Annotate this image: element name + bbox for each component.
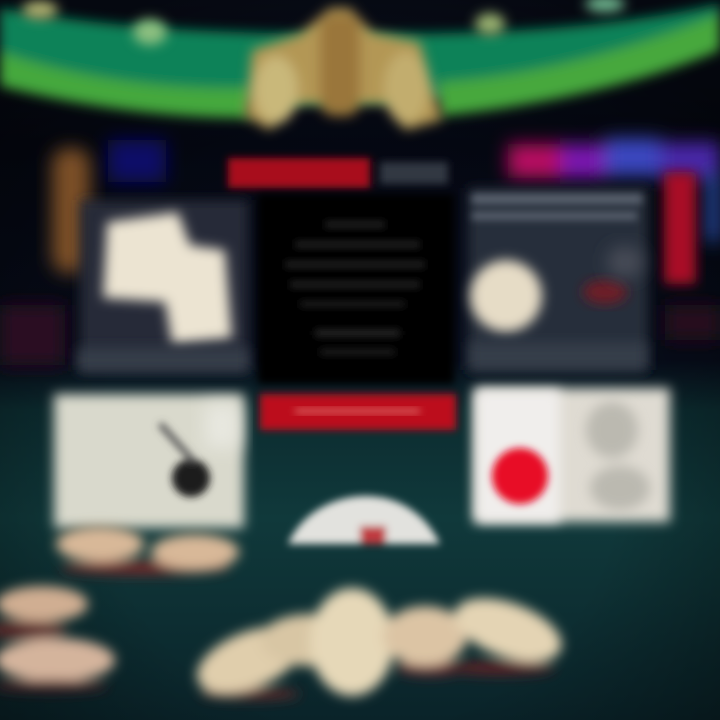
chip pile centre: [188, 585, 570, 707]
top lights: [22, 0, 625, 45]
icon: red circle: [492, 448, 548, 504]
panel: right white card with red circle: [474, 388, 670, 522]
ornate pattern: [586, 402, 650, 510]
icon: cream token: [470, 260, 542, 332]
blurred lines: [285, 222, 425, 354]
neon lights: left blue: [108, 140, 166, 182]
icon: red mark: [583, 280, 627, 304]
left dim red glow: [0, 305, 65, 365]
icon: stacked cards: [103, 212, 232, 344]
chips below card: [56, 526, 239, 575]
left chips: [0, 586, 115, 692]
panel: left cards: [80, 200, 248, 370]
lower grey strips: [78, 342, 646, 372]
right dim glow: [665, 305, 720, 340]
icon: semicircular fan card: [288, 496, 440, 544]
green table arc banner: [0, 4, 720, 118]
right red block: [664, 172, 696, 284]
grey chip: [607, 246, 643, 278]
panel: left white card with black mark: [54, 394, 244, 575]
gold candle decoration: [52, 148, 90, 273]
panel: centre block: [258, 194, 454, 384]
white corner: [205, 404, 239, 448]
blurred heading lines: [472, 194, 642, 220]
red ribbon: [260, 394, 456, 430]
heading bars: [228, 158, 448, 188]
neon lights: right colour strip: [508, 138, 720, 242]
icon: black mark: [160, 424, 210, 497]
panel: right info: [468, 188, 648, 370]
golden central figure: [245, 8, 442, 130]
